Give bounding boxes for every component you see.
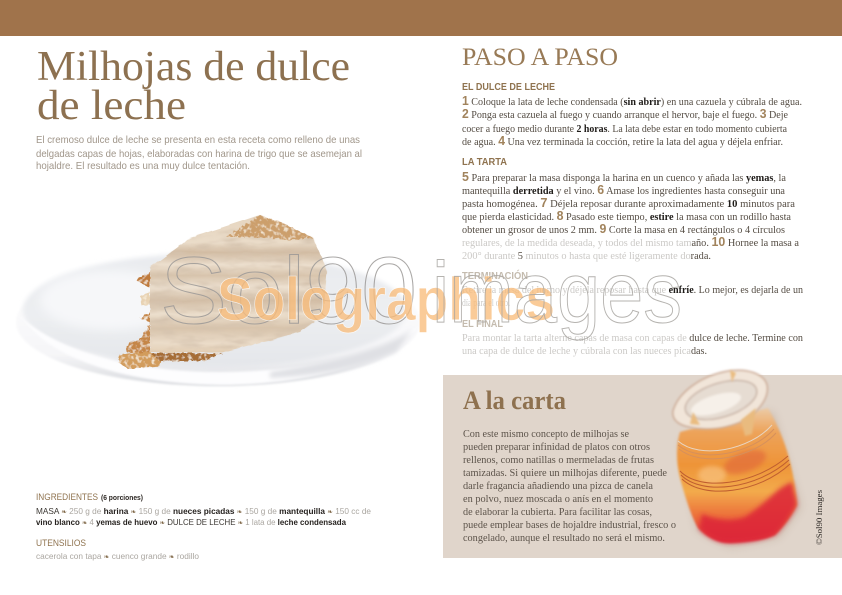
ingredients: MASA ❧ 250 g de harina ❧ 150 g de nueces picadas ❧ 150 g de mantequilla ❧ 150 cc de	[36, 506, 371, 516]
panel text: congelado, aunque el resultado no será el mismo.	[463, 533, 665, 544]
panel text: pueden preparar infinidad de platos con otros	[463, 442, 650, 453]
panel text: rellenos, como natillas o mermeladas de frutas	[463, 455, 654, 466]
section: la tarta	[462, 157, 799, 262]
section: la tarta: regulares, de la medida deseada, y todos del mismo tamaño. 10 Hornee la masa a	[462, 234, 799, 249]
intro text: delgadas capas de hojas, elaboradas con harina de trigo que se asemejan al	[36, 149, 362, 160]
utensils: UTENSILIOS	[36, 537, 86, 548]
top band	[0, 0, 842, 36]
section: el dulce de leche: de agua. 4 Una vez terminada la cocción, retire la lata del agua y déjela enfriar.	[462, 133, 783, 148]
panel text: darle fragancia añadiendo una pizca de canela	[463, 481, 653, 492]
section: el dulce de leche: EL DULCE DE LECHE	[462, 82, 555, 93]
section: terminación: Retire la masa del horno y déjela reposar hasta que enfríe. Lo mejor, es dejarla de un	[462, 284, 804, 296]
photo: slice of cake on a white plate	[16, 215, 420, 386]
intro text: El cremoso dulce de leche se presenta en esta receta como relleno de unas	[36, 135, 360, 146]
panel text: puede emplear bases de hojaldre industrial, fresco o	[463, 520, 676, 531]
section: la tarta: 5 Para preparar la masa disponga la harina en un cuenco y añada las yemas, la	[462, 169, 786, 184]
title: de leche	[37, 83, 186, 129]
utensils: cacerola con tapa ❧ cuenco grande ❧ rodillo	[36, 551, 199, 561]
ingredients: vino blanco ❧ 4 yemas de huevo ❧ DULCE DE LECHE ❧ 1 lata de leche condensada	[36, 517, 346, 527]
section: el dulce de leche: cocer a fuego medio durante 2 horas. La lata debe estar en todo momento cubierta	[462, 123, 787, 135]
panel text: Con este mismo concepto de milhojas se	[463, 429, 629, 440]
ingredients: (6 porciones)	[101, 493, 143, 502]
section: la tarta: 200° durante 5 minutos o hasta que esté ligeramente dorada.	[462, 250, 711, 262]
cake slice	[118, 215, 327, 369]
panel text: de elaborar la cubierta. Para facilitar las cosas,	[463, 507, 652, 518]
section: la tarta: pasta homogénea. 7 Déjela reposar durante aproximadamente 10 minutos para	[462, 195, 795, 210]
step-by-step heading: PASO A PASO	[462, 44, 618, 71]
section: terminación: día para el otro.	[462, 297, 510, 309]
section: el final: EL FINAL	[462, 319, 503, 330]
section: la tarta: LA TARTA	[462, 157, 507, 168]
panel text	[463, 429, 676, 544]
crumbs on top	[226, 215, 313, 240]
watermark: Sol90	[160, 238, 417, 344]
section: la tarta: obtener un grosor de unos 2 mm. 9 Corte la masa en 4 rectángulos o 4 círculos	[462, 221, 785, 236]
section: el dulce de leche: 2 Ponga esta cazuela al fuego y cuando arranque el hervor, baje el fuego. 3 Deje	[462, 106, 788, 121]
title	[37, 44, 350, 129]
intro text: hojaldre. El resultado es una muy dulce tentación.	[36, 161, 250, 172]
panel text: en polvo, nuez moscada o anís en el momento	[463, 494, 653, 505]
glass bands	[678, 425, 790, 491]
section: el final: una capa de dulce de leche y cúbrala con las nueces picadas.	[462, 345, 707, 357]
jar body	[677, 408, 797, 543]
glass rim	[673, 370, 767, 429]
watermark: Solographics	[217, 266, 555, 333]
section: la tarta: mantequilla derretida y el vino. 6 Amase los ingredientes hasta conseguir una	[462, 182, 785, 197]
panel: a la carta	[443, 370, 842, 558]
panel heading: A la carta	[463, 386, 566, 415]
section: el dulce de leche	[462, 82, 802, 148]
section: terminación	[462, 269, 804, 309]
ingredients: INGREDIENTES	[36, 491, 98, 502]
section: el final: Para montar la tarta alterne capas de masa con capas de dulce de leche. Termine con	[462, 332, 804, 344]
speckled orange centre	[721, 445, 769, 479]
section: terminación: TERMINACIÓN	[462, 269, 528, 282]
section: el dulce de leche: 1 Coloque la lata de leche condensada (sin abrir) en una cazuela y cúbrala de agua.	[462, 93, 802, 108]
intro text	[36, 135, 362, 172]
watermark: images	[432, 245, 682, 341]
watermark	[160, 238, 682, 344]
photo credit: ©Sol90 Images	[814, 490, 824, 545]
ingredients	[36, 491, 371, 527]
utensils	[36, 537, 199, 561]
panel text: tamizadas. Si quiere un milhojas diferente, puede	[463, 468, 667, 479]
section: el final	[462, 319, 804, 357]
photo: jar of jam	[673, 370, 800, 546]
crust on the cut side	[118, 272, 222, 369]
red jam	[699, 482, 797, 543]
plate	[16, 253, 420, 386]
section: la tarta: que pierda elasticidad. 8 Pasado este tiempo, estire la masa con un rodillo hasta	[462, 208, 791, 223]
title: Milhojas de dulce	[37, 44, 350, 90]
